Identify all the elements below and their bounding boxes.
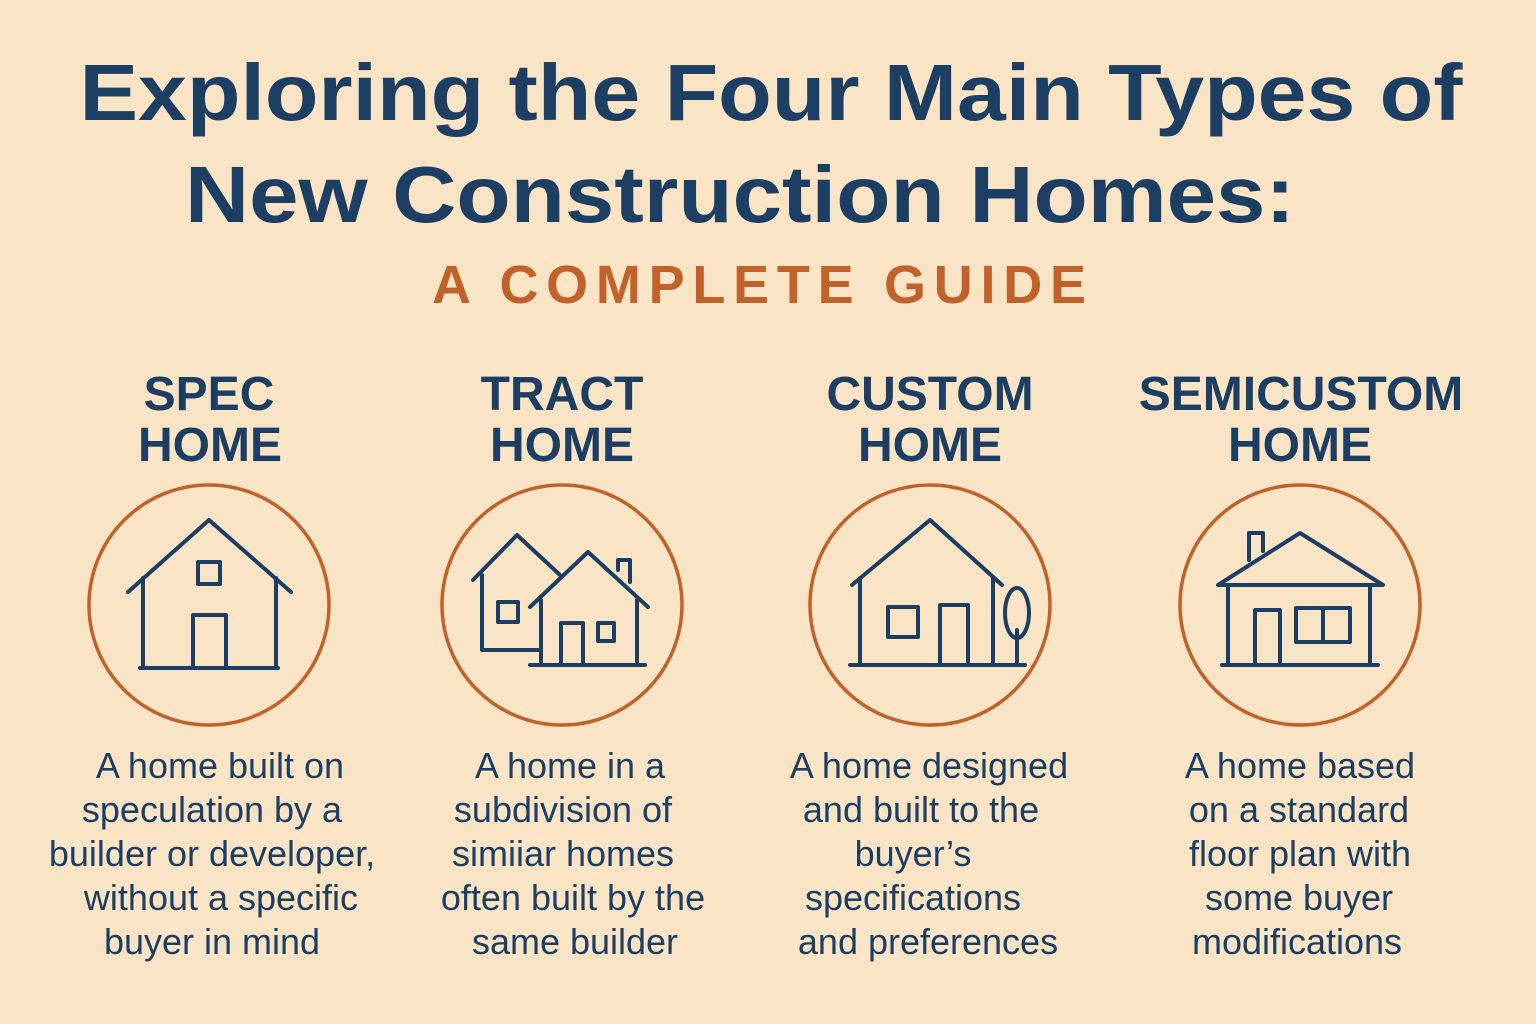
description: tract home: [441, 745, 705, 962]
description: tract home: often built by the: [441, 877, 705, 918]
description: tract home: same builder: [472, 921, 678, 962]
column: semicustom home: [1139, 368, 1463, 962]
description: custom home: [790, 745, 1068, 962]
description: spec home: builder or developer,: [49, 833, 375, 874]
heading: spec home: HOME: [138, 419, 282, 472]
heading: semicustom home: SEMICUSTOM: [1139, 368, 1463, 421]
heading: semicustom home: HOME: [1228, 419, 1372, 472]
description: spec home: without a specific: [83, 877, 358, 918]
heading: tract home: [481, 368, 643, 472]
description: semicustom home: [1185, 745, 1415, 962]
description: semicustom home: on a standard: [1189, 789, 1409, 830]
description: semicustom home: modifications: [1192, 921, 1402, 962]
description: spec home: [49, 745, 375, 962]
heading: custom home: CUSTOM: [826, 368, 1034, 421]
column: custom home: [790, 368, 1068, 962]
icon: custom house with tree: [810, 485, 1050, 725]
description: tract home: A home in a: [475, 745, 666, 786]
title: New Construction Homes:: [185, 150, 1295, 239]
description: custom home: A home designed: [790, 745, 1068, 786]
heading: tract home: HOME: [490, 419, 634, 472]
description: custom home: and preferences: [798, 921, 1058, 962]
column: spec home: [49, 368, 375, 962]
heading: semicustom home: [1139, 368, 1463, 472]
description: semicustom home: floor plan with: [1189, 833, 1411, 874]
column: tract home: [441, 368, 705, 962]
title: Exploring the Four Main Types of: [80, 48, 1463, 137]
heading: spec home: SPEC: [144, 368, 274, 421]
description: custom home: buyer’s: [855, 833, 971, 874]
description: spec home: speculation by a: [82, 789, 343, 830]
icon: spec house: [89, 485, 329, 725]
description: semicustom home: some buyer: [1205, 877, 1393, 918]
description: custom home: and built to the: [803, 789, 1039, 830]
description: tract home: simiiar homes: [452, 833, 674, 874]
subtitle: A COMPLETE GUIDE: [432, 255, 1086, 315]
description: spec home: A home built on: [96, 745, 344, 786]
icon: tract houses: [442, 485, 682, 725]
description: custom home: specifications: [805, 877, 1021, 918]
icon: semicustom house: [1180, 485, 1420, 725]
heading: custom home: HOME: [858, 419, 1002, 472]
description: tract home: subdivision of: [454, 789, 673, 830]
description: spec home: buyer in mind: [104, 921, 320, 962]
heading: tract home: TRACT: [481, 368, 643, 421]
heading: custom home: [826, 368, 1034, 472]
heading: spec home: [138, 368, 282, 472]
title: [80, 48, 1463, 239]
description: semicustom home: A home based: [1185, 745, 1415, 786]
